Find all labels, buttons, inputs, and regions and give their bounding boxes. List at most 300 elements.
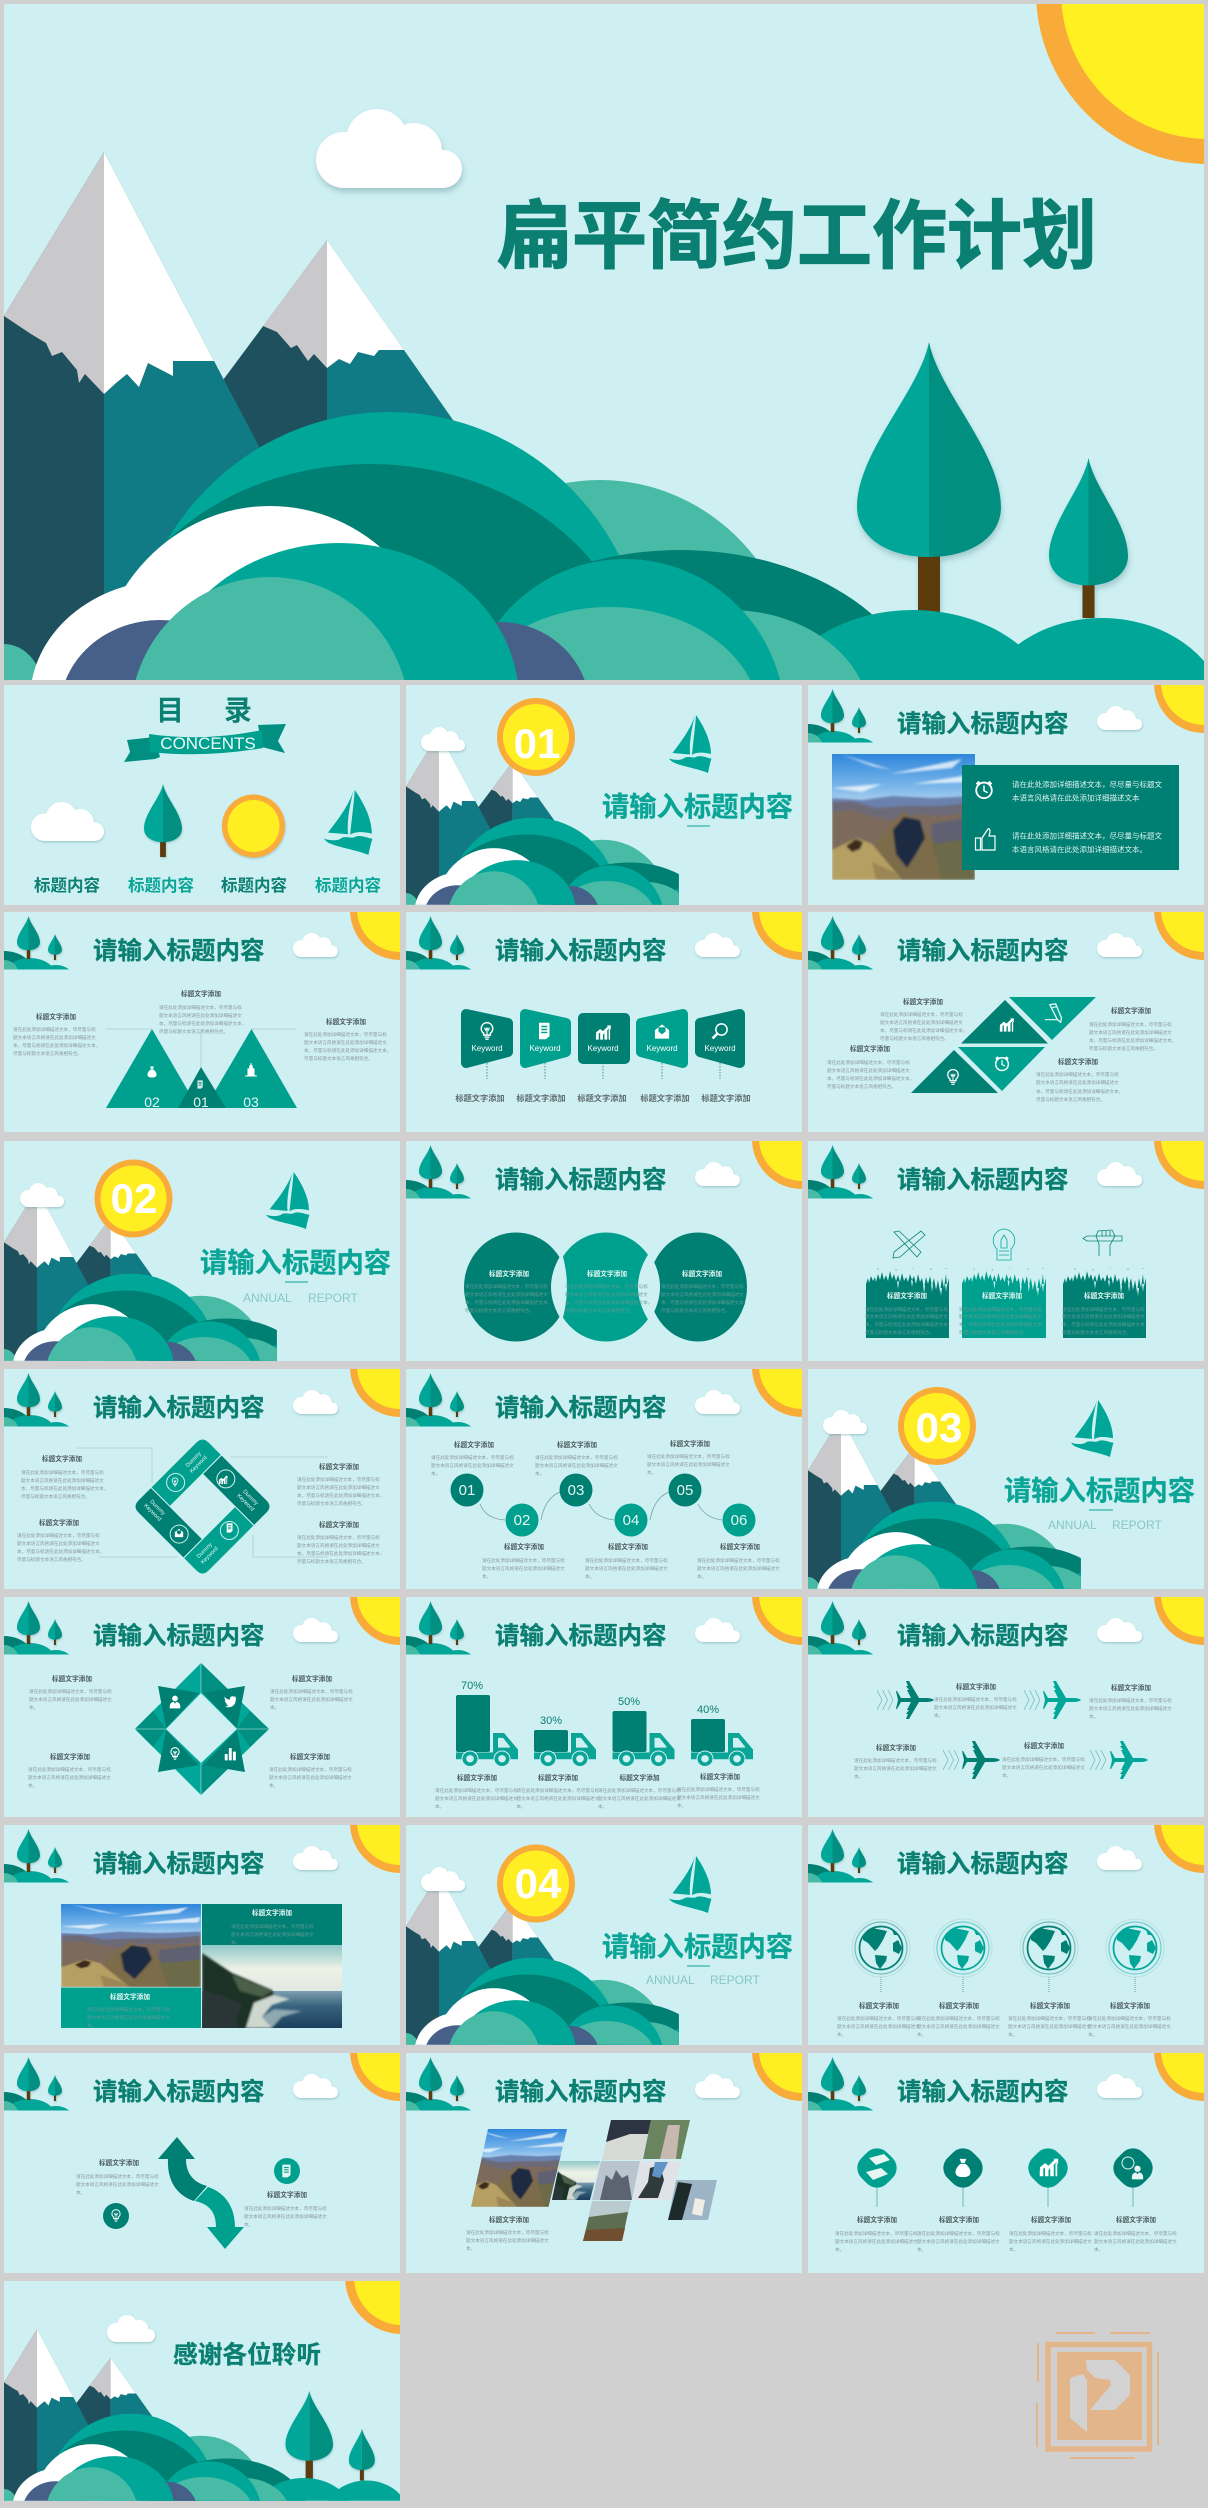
number badge 04	[497, 1844, 575, 1922]
subtitle: REPORT	[308, 1291, 358, 1305]
text block: 本。	[244, 2221, 253, 2228]
subtitle: REPORT	[1112, 1518, 1162, 1532]
text block: 请在此处添加详细描述文本，尽尽量与标	[1002, 1756, 1085, 1763]
text: 本语言风格请在此处添加详细描述文本	[1012, 792, 1140, 802]
text block: 尽量与标题文本语言风格相符合。	[159, 1028, 228, 1035]
block 3: 题文本语言风格请在此处添加详细描述文	[1062, 1313, 1145, 1320]
icon: sun	[345, 2281, 400, 2334]
text block: 请在此处添加详细描述文本，尽尽量与标	[435, 1787, 518, 1794]
icon: sailboat	[669, 1856, 712, 1913]
illustration: mountains and trees	[0, 2329, 408, 2508]
card 2: Keyword	[529, 1044, 561, 1053]
text block: 本，尽量与标请在此处添加详细描述文本，	[21, 1485, 108, 1492]
text block: 本。	[431, 1470, 440, 1477]
block 1: 本，尽量与标请在此处添加详细描述文本，	[865, 1321, 952, 1328]
text block: 请在此处添加详细描述文本，尽尽量与标	[516, 1787, 600, 1794]
text block	[917, 2001, 1000, 2038]
panel: truck chart slide	[376, 1545, 852, 1817]
dark text box: 题文本语言风格请在此处添加详细描述文	[231, 1931, 314, 1938]
text block: 尽量与标题文本语言风格相符合。	[13, 1050, 82, 1057]
text block: 本，尽量与标请在此处添加详细描述文本，	[17, 1548, 104, 1555]
panel: section 01	[406, 685, 802, 905]
text block: 本。	[917, 2246, 926, 2253]
step circles: 02	[514, 1512, 530, 1529]
text block: 标题文字添加	[1031, 2215, 1071, 2224]
text block: 标题文字添加	[859, 2001, 899, 2010]
card 3: Keyword	[587, 1044, 619, 1053]
puzzle ring: Dummy	[241, 1489, 259, 1507]
text block: 标题文字添加	[42, 1454, 82, 1463]
text block: 请在此处添加详细描述文本，尽尽量与标	[1094, 2230, 1177, 2237]
text block	[21, 1454, 108, 1500]
text block: 本，尽量与标请在此处添加详细描述文本，	[827, 1075, 914, 1082]
text block: 题文本语言风格请在此处添加详细描述文	[1009, 2238, 1092, 2245]
text block	[304, 1017, 391, 1062]
text block	[598, 1773, 681, 1810]
text block: 题文本语言风格请在此处添加详细描述文	[585, 1565, 668, 1572]
puzzle ring: Dummy	[185, 1451, 203, 1469]
text block	[585, 1542, 668, 1580]
text block: 题文本语言风格请在此处添加详细描述文	[837, 2023, 920, 2030]
text block: 标题文字添加	[670, 1439, 710, 1448]
panel: section 03	[808, 1369, 1204, 1589]
star diagram	[135, 1663, 269, 1795]
text block: 尽量与标题文本语言风格相符合。	[1036, 1096, 1105, 1103]
subtitle: ANNUAL	[243, 1291, 292, 1305]
panel: folded triangles slide	[778, 860, 1208, 1132]
text block: 标题文字添加	[1058, 1057, 1098, 1066]
card 5	[700, 1014, 740, 1063]
slide title: 请输入标题内容	[897, 1850, 1068, 1878]
text block: 本。	[697, 1573, 706, 1580]
text block: 请在此处添加详细描述文本，尽尽量与标	[1089, 1021, 1172, 1028]
circles	[464, 1232, 747, 1342]
text block: 题文本语言风格请在此处添加详细描述文	[297, 1542, 380, 1549]
text block: 本。	[1094, 2246, 1103, 2253]
panel: grass blocks slide	[778, 1089, 1208, 1361]
icon: tree	[144, 784, 182, 857]
ribbon with CONCENTS	[124, 724, 286, 762]
text block: 尽量与标题文本语言风格相符合。	[21, 1493, 90, 1500]
text block: 本，尽量与标请在此处添加详细描述文本，	[1089, 1037, 1176, 1044]
labels: 标题内容	[128, 875, 194, 895]
text block: 本。	[1008, 2031, 1017, 2038]
text block: 请在此处添加详细描述文本，尽尽量与标	[697, 1557, 780, 1564]
block 3: 尽量与标题文本语言风格相符合。	[1062, 1329, 1131, 1336]
text block: 题文本语言风格请在此处添加详细描述文	[1036, 1079, 1119, 1086]
watermark stamp	[1037, 2333, 1158, 2458]
text block: 题文本语言风格请在此处添加详细描述文	[934, 1704, 1017, 1711]
text block	[917, 2215, 1000, 2253]
text block: 本。	[647, 1469, 656, 1476]
text block: 本，尽量与标请在此处添加详细描述文本，	[297, 1550, 384, 1557]
text block: 题文本语言风格请在此处添加详细描述文	[17, 1540, 100, 1547]
slide title: 请输入标题内容	[495, 2078, 666, 2106]
text block: 请在此处添加详细描述文本，尽尽量与标	[13, 1026, 96, 1033]
text block: 题文本语言风格请在此处添加详细描述文	[1002, 1764, 1085, 1771]
card 5: Keyword	[704, 1044, 736, 1053]
block 2: 请在此处添加详细描述文本，尽尽量与标	[959, 1306, 1042, 1313]
text block: 请在此处添加详细描述文本，尽尽量与标	[565, 1283, 648, 1290]
text block	[270, 1674, 353, 1711]
section title: 请输入标题内容	[602, 1931, 793, 1962]
text block: 尽量与标题文本语言风格相符合。	[297, 1500, 366, 1507]
plane 3	[943, 1741, 1000, 1779]
triangle chart: 01	[193, 1094, 209, 1110]
labels: 标题内容	[315, 875, 382, 895]
truck 30%: 30%	[540, 1715, 562, 1727]
text block: 请在此处添加详细描述文本，尽尽量与标	[1009, 2230, 1092, 2237]
section title: 请输入标题内容	[602, 791, 793, 822]
text block: 本，尽量与标请在此处添加详细描述文本，	[565, 1299, 652, 1306]
badge: growth chart	[1023, 2143, 1073, 2193]
teal text box	[61, 1988, 201, 2029]
text block: 本。	[854, 1773, 863, 1780]
text block: 请在此处添加详细描述文本，尽尽量与标	[76, 2173, 159, 2180]
card 4	[641, 1014, 683, 1063]
slide title: 请输入标题内容	[93, 1622, 264, 1650]
text block	[535, 1440, 618, 1477]
truck 30%	[534, 1715, 596, 1767]
text block: 标题文字添加	[290, 1752, 330, 1761]
text block: 题文本语言风格请在此处添加详细描述文	[1094, 2238, 1177, 2245]
card 4: Keyword	[646, 1044, 678, 1053]
number badge 01: 01	[514, 720, 560, 767]
text block	[76, 2158, 159, 2196]
text block: 标题文字添加	[454, 1440, 494, 1449]
underline	[687, 826, 710, 827]
text block: 标题文字添加	[1111, 1683, 1151, 1692]
icon: sailboat	[324, 790, 372, 855]
panel: photo collage slide	[406, 2053, 802, 2273]
globe 3	[1020, 1919, 1078, 1977]
block 2: 尽量与标题文本语言风格相符合。	[959, 1329, 1028, 1336]
text block: 本。	[1088, 2031, 1097, 2038]
panel: triangles slide	[0, 860, 450, 1132]
text block: 请在此处添加详细描述文本，尽尽量与标	[827, 1059, 910, 1066]
text block: 请在此处添加详细描述文本，尽尽量与标	[917, 2230, 1000, 2237]
text block	[854, 1743, 937, 1780]
slide title: 请输入标题内容	[897, 710, 1068, 738]
text block	[435, 1773, 518, 1810]
step circles: 06	[731, 1512, 747, 1529]
labels: 标题内容	[34, 875, 100, 895]
text block: 标题文字添加	[903, 997, 943, 1006]
text block: 本。	[837, 2031, 846, 2038]
text block: 请在此处添加详细描述文本，尽尽量与标	[661, 1283, 744, 1290]
underline	[687, 1966, 710, 1967]
slide title: 请输入标题内容	[93, 937, 264, 965]
subtitle: ANNUAL	[1048, 1518, 1097, 1532]
icon: pencil and ruler	[893, 1231, 925, 1258]
text block: 标题文字添加	[850, 1044, 890, 1053]
text block: 请在此处添加详细描述文本，尽尽量与标	[677, 1786, 760, 1793]
panel: globes slide	[778, 1773, 1208, 2045]
panel: numbered steps slide	[376, 1317, 852, 1589]
text block: 题文本语言风格请在此处添加详细描述文	[598, 1795, 681, 1802]
text block	[13, 1012, 100, 1057]
step circles: 01	[459, 1482, 475, 1499]
card 3	[583, 1018, 625, 1059]
text block: 标题文字添加	[292, 1674, 332, 1683]
text block: 标题文字添加	[50, 1752, 90, 1761]
text block: 尽量与标题文本语言风格相符合。	[304, 1055, 373, 1062]
text block: 本。	[1089, 1713, 1098, 1720]
text	[1012, 779, 1162, 854]
text block: 题文本语言风格请在此处添加详细描述文	[244, 2213, 327, 2220]
number badge 03	[898, 1387, 976, 1465]
card labels: 标题文字添加	[640, 1093, 690, 1103]
panel: star diamond slide	[0, 1545, 450, 1817]
puzzle ring: Keyword	[200, 1546, 220, 1566]
globe 2	[934, 1919, 992, 1977]
block 2: 标题文字添加	[982, 1291, 1022, 1300]
text block	[465, 1269, 552, 1314]
text block: 标题文字添加	[181, 989, 221, 998]
text block: 本。	[835, 2246, 844, 2253]
text block: 本，尽量与标请在此处添加详细描述文本，	[465, 1299, 552, 1306]
text block: 标题文字添加	[557, 1440, 597, 1449]
block 1: 尽量与标题文本语言风格相符合。	[865, 1329, 934, 1336]
text block: 请在此处添加详细描述文本，尽尽量与标	[17, 1532, 100, 1539]
puzzle ring: Dummy	[196, 1542, 214, 1560]
text block	[827, 1044, 914, 1090]
leader lines	[106, 1029, 296, 1067]
text block: 请在此处添加详细描述文本，尽尽量与标	[28, 1766, 111, 1773]
icon: sun	[222, 794, 285, 858]
labels: 标题内容	[221, 875, 288, 895]
truck 50%	[612, 1696, 674, 1767]
text block	[1036, 1057, 1123, 1103]
text block	[29, 1674, 112, 1711]
text block: 本，尽量与标请在此处添加详细描述文本，	[1036, 1088, 1123, 1095]
globe 4	[1106, 1919, 1164, 1977]
text block	[677, 1772, 760, 1809]
teal text box: 请在此处添加详细描述文本，尽尽量与标	[87, 2006, 170, 2013]
truck 40%: 40%	[697, 1704, 719, 1716]
block 1: 标题文字添加	[887, 1291, 927, 1300]
text block: 本。	[585, 1573, 594, 1580]
icon: cloud	[31, 802, 104, 841]
icon: sailboat	[669, 715, 712, 773]
text block	[647, 1439, 730, 1476]
text block: 尽量与标题文本语言风格相符合。	[1089, 1045, 1158, 1052]
text block: 标题文字添加	[700, 1772, 740, 1781]
plane 2	[1024, 1681, 1081, 1719]
subtitle	[1048, 1518, 1162, 1532]
text block: 本。	[934, 1712, 943, 1719]
illustration: mountains	[406, 751, 679, 905]
subtitle: REPORT	[710, 1973, 760, 1987]
text block: 请在此处添加详细描述文本，尽尽量与标	[585, 1557, 668, 1564]
text block: 题文本语言风格请在此处添加详细描述文	[297, 1484, 380, 1491]
text block: 本，尽量与标请在此处添加详细描述文本，	[661, 1299, 748, 1306]
text block	[516, 1773, 600, 1810]
text block: 题文本语言风格请在此处添加详细描述文	[854, 1765, 937, 1772]
number badge 03: 03	[916, 1404, 962, 1451]
text block: 本。	[435, 1803, 444, 1810]
text block: 本。	[269, 1782, 278, 1789]
text block: 题文本语言风格请在此处添加详细描述文	[917, 2238, 1000, 2245]
text block: 标题文字添加	[619, 1773, 660, 1782]
text block: 标题文字添加	[267, 2190, 307, 2199]
block 2: 本，尽量与标请在此处添加详细描述文本，	[959, 1321, 1046, 1328]
dashed connectors	[881, 1977, 1135, 1992]
panel: thank you slide	[4, 2281, 400, 2501]
heading: contents: 录	[224, 695, 252, 726]
icon: cloud	[107, 2315, 155, 2342]
text block: 题文本语言风格请在此处添加详细描述文	[1089, 1029, 1172, 1036]
text block: 本。	[1009, 2246, 1018, 2253]
subtitle	[646, 1973, 760, 1987]
text block: 题文本语言风格请在此处添加详细描述文	[1088, 2023, 1171, 2030]
text block: 题文本语言风格请在此处添加详细描述文	[535, 1462, 618, 1469]
text block: 本。	[28, 1782, 37, 1789]
text block	[934, 1682, 1017, 1719]
slide title: 请输入标题内容	[93, 2078, 264, 2106]
panel: photo grid slide	[0, 1773, 450, 2045]
text block: 标题文字添加	[608, 1542, 648, 1551]
text block: 题文本语言风格请在此处添加详细描述文	[565, 1291, 648, 1298]
card 2	[525, 1014, 566, 1063]
badge: money bag	[938, 2143, 988, 2193]
text block: 标题文字添加	[489, 1269, 529, 1278]
block 2: 题文本语言风格请在此处添加详细描述文	[959, 1313, 1042, 1320]
photo: mountain	[61, 1904, 201, 1987]
truck 70%: 70%	[461, 1680, 483, 1692]
text block	[1089, 1006, 1176, 1052]
title: 扁平简约工作计划	[497, 194, 1097, 278]
text block	[466, 2215, 549, 2252]
illustration: mountains, hills and trees	[0, 152, 1208, 948]
card labels	[455, 1093, 751, 1103]
icon: pencil bulb	[993, 1229, 1015, 1260]
text block: 标题文字添加	[587, 1269, 627, 1278]
subtitle	[243, 1291, 358, 1305]
text block: 本。	[76, 2189, 85, 2196]
text block	[1002, 1741, 1085, 1779]
slide title: 请输入标题内容	[93, 1394, 264, 1422]
icon: sailboat	[1071, 1400, 1114, 1457]
globe 1	[852, 1919, 910, 1977]
block 2	[959, 1266, 1046, 1338]
icon: cloud	[316, 109, 462, 188]
text block	[1008, 2001, 1091, 2038]
number badge 01	[497, 698, 575, 776]
text block: 标题文字添加	[956, 1682, 996, 1691]
panel: keyword cards slide	[376, 860, 852, 1132]
icon: cloud	[823, 1410, 867, 1434]
puzzle ring: Keyword	[235, 1493, 255, 1513]
text block: 尽量与标题文本语言风格相符合。	[17, 1556, 86, 1563]
text panel	[962, 765, 1179, 870]
icon: cloud	[421, 1867, 465, 1891]
number badge 04: 04	[515, 1860, 562, 1907]
text block	[565, 1269, 652, 1314]
connectors	[877, 2185, 1133, 2207]
step circles: 03	[568, 1482, 584, 1499]
slide title: 请输入标题内容	[897, 1166, 1068, 1194]
text block	[661, 1269, 748, 1314]
text block	[159, 989, 246, 1035]
text block: 题文本语言风格请在此处添加详细描述文	[431, 1462, 514, 1469]
text block	[880, 997, 967, 1042]
text block: 本，尽量与标请在此处添加详细描述文本，	[159, 1020, 246, 1027]
badge: money	[852, 2143, 902, 2193]
slide title: 请输入标题内容	[495, 937, 666, 965]
text block: 请在此处添加详细描述文本，尽尽量与标	[29, 1688, 112, 1695]
block 3: 标题文字添加	[1084, 1291, 1124, 1300]
text block	[1089, 1683, 1172, 1720]
panel: three circles slide	[376, 1089, 852, 1361]
text block: 请在此处添加详细描述文本，尽尽量与标	[244, 2205, 327, 2212]
text block: 请在此处添加详细描述文本，尽尽量与标	[854, 1757, 937, 1764]
text: 请在此处添加详细描述文本，尽尽量与标题文	[1012, 830, 1162, 840]
text block: 题文本语言风格请在此处添加详细描述文	[827, 1067, 910, 1074]
text block: 题文本语言风格请在此处添加详细描述文	[21, 1477, 104, 1484]
photo: mountain	[832, 754, 975, 880]
step circles: 04	[623, 1512, 639, 1529]
text block: 题文本语言风格请在此处添加详细描述文	[647, 1461, 730, 1468]
text block: 标题文字添加	[538, 1773, 578, 1782]
text block: 本。	[917, 2031, 926, 2038]
text block: 题文本语言风格请在此处添加详细描述文	[465, 1291, 548, 1298]
triangle chart: 03	[243, 1094, 259, 1110]
text block: 本。	[598, 1803, 607, 1810]
illustration: mountains	[808, 1434, 1081, 1589]
text block: 请在此处添加详细描述文本，尽尽量与标	[835, 2230, 918, 2237]
text block: 题文本语言风格请在此处添加详细描述文	[516, 1795, 600, 1802]
text block: 标题文字添加	[99, 2158, 139, 2167]
slide title: 请输入标题内容	[495, 1394, 666, 1422]
underline	[1089, 1510, 1113, 1511]
text block	[28, 1752, 111, 1789]
step circles	[450, 1474, 756, 1536]
card 1: Keyword	[471, 1044, 503, 1053]
slide title: 请输入标题内容	[897, 937, 1068, 965]
text block: 尽量与标题文本语言风格相符合。	[465, 1307, 534, 1314]
text block: 本。	[677, 1802, 686, 1809]
subtitle: ANNUAL	[646, 1973, 695, 1987]
block 3: 请在此处添加详细描述文本，尽尽量与标	[1062, 1306, 1145, 1313]
icon: sun	[1036, 0, 1208, 164]
text block: 题文本语言风格请在此处添加详细描述文	[880, 1019, 963, 1026]
text block: 标题文字添加	[1116, 2215, 1156, 2224]
text block	[1094, 2215, 1177, 2253]
text block: 请在此处添加详细描述文本，尽尽量与标	[598, 1787, 681, 1794]
panel: badge icons slide	[778, 2001, 1208, 2273]
text block: 标题文字添加	[319, 1462, 359, 1471]
text block	[835, 2215, 918, 2253]
text block: 标题文字添加	[720, 1542, 760, 1551]
text: 本语言风格请在此处添加详细描述文本。	[1012, 844, 1147, 854]
text block: 题文本语言风格请在此处添加详细描述文	[677, 1794, 760, 1801]
text block: 请在此处添加详细描述文本，尽尽量与标	[535, 1454, 618, 1461]
text block: 标题文字添加	[1111, 1006, 1151, 1015]
labels	[34, 875, 382, 895]
text block: 标题文字添加	[1024, 1741, 1064, 1750]
text block: 题文本语言风格请在此处添加详细描述文	[466, 2237, 549, 2244]
text block	[697, 1542, 780, 1580]
text block: 请在此处添加详细描述文本，尽尽量与标	[1089, 1697, 1172, 1704]
icon circle: document	[274, 2158, 300, 2184]
teal text box: 标题文字添加	[110, 1992, 150, 2001]
text block: 标题文字添加	[326, 1017, 366, 1026]
illustration: mountains	[406, 1891, 679, 2045]
text block: 尽量与标题文本语言风格相符合。	[880, 1035, 949, 1042]
text block	[1088, 2001, 1171, 2038]
text block: 标题文字添加	[1110, 2001, 1150, 2010]
